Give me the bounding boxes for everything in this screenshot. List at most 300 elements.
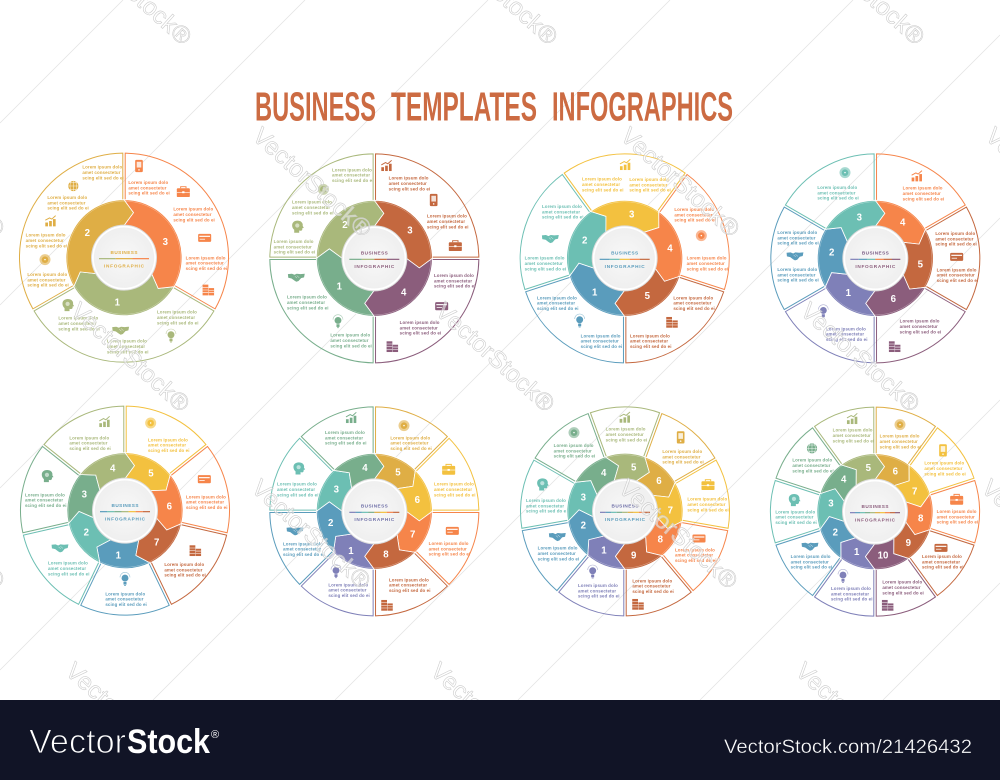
text: Lorem ipsum dolo [434,273,474,278]
text: amet consectetur [434,278,472,283]
icon: card [198,234,211,242]
arrow 1: 1 [854,547,860,558]
text: Lorem ipsum dolo [777,267,817,272]
text: scing elit sed do ei [900,329,941,334]
icon: globe [807,443,817,453]
icon: chart [346,412,356,423]
arrow 2 [316,200,384,258]
arrow 2: 2 [84,527,89,538]
icon: card [692,534,706,543]
text: scing elit sed do ei [283,552,325,557]
arrow 3 [374,200,432,268]
center hub [318,202,431,315]
arrow 3 [124,200,182,288]
text: scing elit sed do ei [687,507,729,512]
text: Lorem ipsum dolo [578,583,618,588]
text: Lorem ipsum dolo [186,494,226,499]
center hub: INFOGRAPHIC [354,517,395,522]
text: amet consectetur [429,546,467,551]
arrow 7 [397,511,432,552]
text: Lorem ipsum dolo [429,541,469,546]
arrow 2 [800,222,863,287]
icon: handshake [112,327,129,335]
text: Lorem ipsum dolo [673,295,713,300]
text: amet consectetur [817,190,856,195]
text: scing elit sed do ei [427,224,469,229]
icon: head [293,462,305,474]
arrow 1 [570,263,625,316]
text: scing elit sed do ei [47,206,89,211]
text: scing elit sed do ei [332,178,374,183]
wheel: 4 steps [270,154,479,363]
text: Lorem ipsum dolo [833,428,873,433]
panel 2 [765,515,846,596]
panel 2 [507,503,595,591]
text: Lorem ipsum dolo [775,509,815,514]
text: scing elit sed do ei [831,597,873,602]
text: scing elit sed do ei [525,266,566,271]
text: amet consectetur [186,500,224,505]
icon: phone [677,431,684,443]
arrow 1 [333,534,374,569]
arrow 4 [575,450,622,499]
arrow 2: 2 [342,220,348,231]
arrow 6: 6 [656,476,662,487]
center hub: BUSINESS [111,503,138,508]
arrow 1: 1 [592,287,598,298]
arrow 3 [58,471,106,524]
text: amet consectetur [47,200,86,205]
text: scing elit sed do ei [69,446,111,451]
text: scing elit sed do ei [48,571,90,576]
watermarks: VectorStock® [790,657,920,778]
text: Lorem ipsum dolo [173,207,213,212]
text: amet consectetur [157,315,195,320]
center hub: BUSINESS [361,251,388,256]
center hub: INFOGRAPHIC [354,264,395,269]
arrow 2: 2 [581,520,586,531]
text: Lorem ipsum dolo [277,482,317,487]
text: Lorem ipsum dolo [882,580,922,585]
text: amet consectetur [831,591,869,596]
icon: target [39,254,50,265]
text: Lorem ipsum dolo [389,577,429,582]
center hub: INFOGRAPHIC [104,263,145,268]
center hub [68,454,182,567]
arrow 1: 1 [337,282,343,293]
panel 4 [637,174,766,301]
panel 1 [815,559,874,616]
text: scing elit sed do ei [542,215,584,220]
text: scing elit sed do ei [882,590,924,595]
text: amet consectetur [538,551,576,556]
arrow 2 [59,509,116,563]
footer image id: VectorStock.com/21426432 [724,736,972,758]
panel 6 [405,438,500,533]
icon: head [537,478,549,490]
watermarks: VectorStock® [247,122,377,243]
text: Lorem ipsum dolo [434,482,474,487]
arrow 5: 5 [631,463,637,474]
center hub: BUSINESS [861,504,888,509]
panel 5 [902,207,1000,321]
icon: handshake [787,252,803,260]
text: scing elit sed do ei [389,186,430,191]
wheel: 6 steps [740,128,1000,388]
text: scing elit sed do ei [25,503,67,508]
icon: phone [430,194,437,206]
panel 5 [590,390,672,468]
text: amet consectetur [332,173,370,178]
arrow 4 [80,439,138,498]
icon: globe [68,181,78,191]
text: amet consectetur [274,244,312,249]
text: amet consectetur [277,487,315,492]
text: Lorem ipsum dolo [525,256,565,261]
text: amet consectetur [777,272,816,277]
arrow 9 [612,530,662,580]
text: Lorem ipsum dolo [687,497,727,502]
text: scing elit sed do ei [777,278,819,283]
icon: bulb [333,315,343,328]
text: scing elit sed do ei [128,191,170,196]
text: amet consectetur [673,301,712,306]
arrow 3: 3 [163,237,169,248]
arrow 2 [45,192,151,287]
text: amet consectetur [775,515,814,520]
icon: card [435,302,448,310]
text: amet consectetur [526,503,564,508]
text: amet consectetur [826,332,864,337]
text: scing elit sed do ei [400,331,441,336]
icon: chart [847,413,857,424]
panel 8 [352,542,447,637]
footer logo: Vector [29,723,126,761]
icon: phone [135,160,143,172]
text: amet consectetur [792,463,831,468]
watermarks: VectorStock® [613,474,743,595]
icon: target [318,184,329,195]
text: Lorem ipsum dolo [274,239,314,244]
text: amet consectetur [882,585,921,590]
panel 4 [535,402,619,488]
panel 5 [376,407,447,469]
arrow 4 [365,258,432,316]
text: scing elit sed do ei [390,446,432,451]
text: amet consectetur [922,559,960,564]
arrow 4 [627,211,703,287]
text: scing elit sed do ei [582,187,624,192]
text: Lorem ipsum dolo [632,578,672,583]
arrow 8 [900,494,941,536]
center hub [67,201,181,314]
center hub [318,455,431,568]
panel 3 [511,454,580,528]
icon: bulb [588,565,598,578]
text: Lorem ipsum dolo [105,591,145,596]
text: amet consectetur [25,498,63,503]
panel 9 [603,547,691,634]
icon: chart [381,160,392,171]
text: Lorem ipsum dolo [330,333,370,338]
panel 9 [902,528,974,601]
panel 1 [559,557,624,616]
text: Lorem ipsum dolo [287,295,327,300]
arrow 8: 8 [383,550,389,561]
text: scing elit sed do ei [186,505,228,510]
text: Lorem ipsum dolo [791,554,831,559]
text: Lorem ipsum dolo [538,546,578,551]
text: scing elit sed do ei [82,175,124,180]
text: Lorem ipsum dolo [69,435,109,440]
footer bar [0,700,1000,780]
text: Lorem ipsum dolo [687,256,727,261]
arrow 3: 3 [334,484,340,495]
text: amet consectetur [900,324,938,329]
text: scing elit sed do ei [630,344,672,349]
arrow 8 [643,516,682,558]
text: scing elit sed do ei [325,441,367,446]
text: Lorem ipsum dolo [48,561,88,566]
panel 5 [612,265,724,385]
text: amet consectetur [662,454,701,459]
arrow 4: 4 [601,468,607,479]
icon: handshake [542,235,559,243]
arrow 10 [863,533,909,579]
arrow 4 [333,441,387,495]
icon: coins [190,545,201,556]
text: scing elit sed do ei [903,196,944,201]
icon: chart [620,412,630,423]
text: amet consectetur [283,547,321,552]
text: amet consectetur [687,261,725,266]
text: amet consectetur [674,212,713,217]
text: scing elit sed do ei [58,326,100,331]
icon: target [568,427,579,438]
panel 1 [301,553,373,616]
text: scing elit sed do ei [328,593,370,598]
text: Lorem ipsum dolo [935,231,975,236]
watermarks: VectorStock® [60,657,190,778]
arrow 1 [316,249,374,316]
arrow 6 [390,470,444,524]
text: amet consectetur [292,205,330,210]
icon: bulb [166,329,176,342]
text: Lorem ipsum dolo [47,195,87,200]
panel 2 [7,509,108,604]
text: Lorem ipsum dolo [880,434,920,439]
text: amet consectetur [937,273,975,278]
arrow 3: 3 [857,212,863,223]
arrow 1 [68,242,174,337]
arrow 7 [134,515,182,568]
panel 4 [301,386,396,481]
arrow 6: 6 [415,495,421,506]
icon: coins [203,285,214,295]
panel 7 [904,428,985,509]
text: scing elit sed do ei [429,552,470,557]
panel 3 [785,128,894,242]
arrow 2 [304,498,358,552]
panel 3 [125,153,229,309]
panel 2 [0,142,168,309]
watermarks: VectorStock® [246,474,376,595]
arrow 6: 6 [891,294,897,305]
icon: handshake [52,544,68,552]
text: amet consectetur [330,338,369,343]
panel 6 [856,274,965,388]
arrow 1 [825,273,875,316]
text: Lorem ipsum dolo [148,437,188,442]
text: amet consectetur [48,566,86,571]
wheel: 5 steps [495,116,766,385]
arrow 3 [825,186,888,251]
arrow 6 [863,265,926,331]
text: amet consectetur [542,209,580,214]
panel 4 [376,260,479,363]
watermarks: VectorStock® [65,297,195,418]
text: amet consectetur [777,235,816,240]
arrow 3: 3 [581,493,587,504]
center hub [818,455,932,568]
center hub: BUSINESS [110,250,137,255]
arrow 6 [875,454,909,486]
text: scing elit sed do ei [775,520,817,525]
panel 1 [27,233,214,400]
text: amet consectetur [148,443,186,448]
arrow 4: 4 [110,464,116,475]
panel 1 [526,277,623,363]
text: amet consectetur [173,212,212,217]
text: scing elit sed do ei [389,588,431,593]
icon: coins [666,317,678,328]
text: scing elit sed do ei [777,241,819,246]
icon: head [42,470,53,482]
text: amet consectetur [675,553,713,558]
icon: target [398,420,409,431]
center hub: BUSINESS [611,251,638,256]
panel 1 [68,545,169,640]
icon: handshake [549,533,566,541]
text: amet consectetur [328,588,367,593]
text: Lorem ipsum dolo [164,562,204,567]
text: amet consectetur [554,448,592,453]
text: Lorem ipsum dolo [58,316,98,321]
text: Lorem ipsum dolo [937,509,977,514]
panel 4 [776,422,848,496]
text: Lorem ipsum dolo [924,461,964,466]
icon: chart [620,159,630,170]
arrow 3: 3 [407,226,413,237]
arrow 4: 4 [362,463,368,474]
arrow 2 [813,513,860,559]
panel 7 [665,460,749,546]
text: scing elit sed do ei [434,492,476,497]
text: amet consectetur [390,441,429,446]
text: scing elit sed do ei [274,250,315,255]
panel 2 [270,154,374,257]
text: scing elit sed do ei [675,558,717,563]
icon: head [292,221,304,233]
text: Lorem ipsum dolo [554,443,594,448]
panel 3 [376,154,479,257]
arrow 1 [588,536,625,569]
text: scing elit sed do ei [292,210,334,215]
center hub: INFOGRAPHIC [605,264,645,269]
text: amet consectetur [107,344,145,349]
icon: handshake [288,274,305,282]
panel 6 [642,414,723,492]
arrow 8 [361,527,415,581]
text: Lorem ipsum dolo [26,233,66,238]
text: Lorem ipsum dolo [427,214,467,219]
panel 2 [249,489,344,584]
text: scing elit sed do ei [107,349,149,354]
text: amet consectetur [629,182,668,187]
panel 2 [495,170,606,289]
icon: bulb [575,314,585,327]
text: scing elit sed do ei [937,520,978,525]
text: Lorem ipsum dolo [292,200,332,205]
arrow 5 [888,229,951,295]
arrow 5: 5 [645,291,651,302]
panel 1 [785,288,874,363]
panel 3 [564,116,694,242]
text: scing elit sed do ei [157,320,199,325]
text: amet consectetur [525,261,563,266]
text: scing elit sed do ei [817,196,859,201]
text: amet consectetur [186,261,224,266]
text: amet consectetur [69,441,108,446]
text: Lorem ipsum dolo [82,165,122,170]
text: Lorem ipsum dolo [537,295,577,300]
text: scing elit sed do ei [526,509,568,514]
text: scing elit sed do ei [434,284,476,289]
text: scing elit sed do ei [924,471,966,476]
arrow 8: 8 [658,535,664,546]
arrow 5 [374,453,415,489]
text: amet consectetur [630,339,668,344]
arrow 5 [125,453,170,491]
text: Lorem ipsum dolo [675,547,715,552]
watermarks: VectorStock® [795,297,925,418]
text: Lorem ipsum dolo [283,541,323,546]
icon: card [446,527,459,535]
icon: target [894,419,905,430]
panel 8 [658,520,728,595]
arrow 5 [605,444,652,488]
arrow 5: 5 [918,260,924,271]
arrow 6: 6 [893,467,899,478]
arrow 1: 1 [116,551,122,562]
center hub [819,202,932,315]
text: scing elit sed do ei [330,343,372,348]
text: scing elit sed do ei [277,492,319,497]
center hub: INFOGRAPHIC [855,264,896,269]
arrow 7: 7 [410,530,415,541]
arrow 1 [93,529,150,583]
text: scing elit sed do ei [687,266,728,271]
text: Lorem ipsum dolo [629,177,669,182]
panel 2 [740,195,849,310]
icon: phone [939,444,947,456]
arrow 5 [841,445,887,491]
arrow 5: 5 [395,468,401,479]
arrow 7: 7 [912,486,917,497]
text: scing elit sed do ei [164,573,206,578]
panel 5 [815,392,896,472]
arrow 6 [633,457,680,501]
